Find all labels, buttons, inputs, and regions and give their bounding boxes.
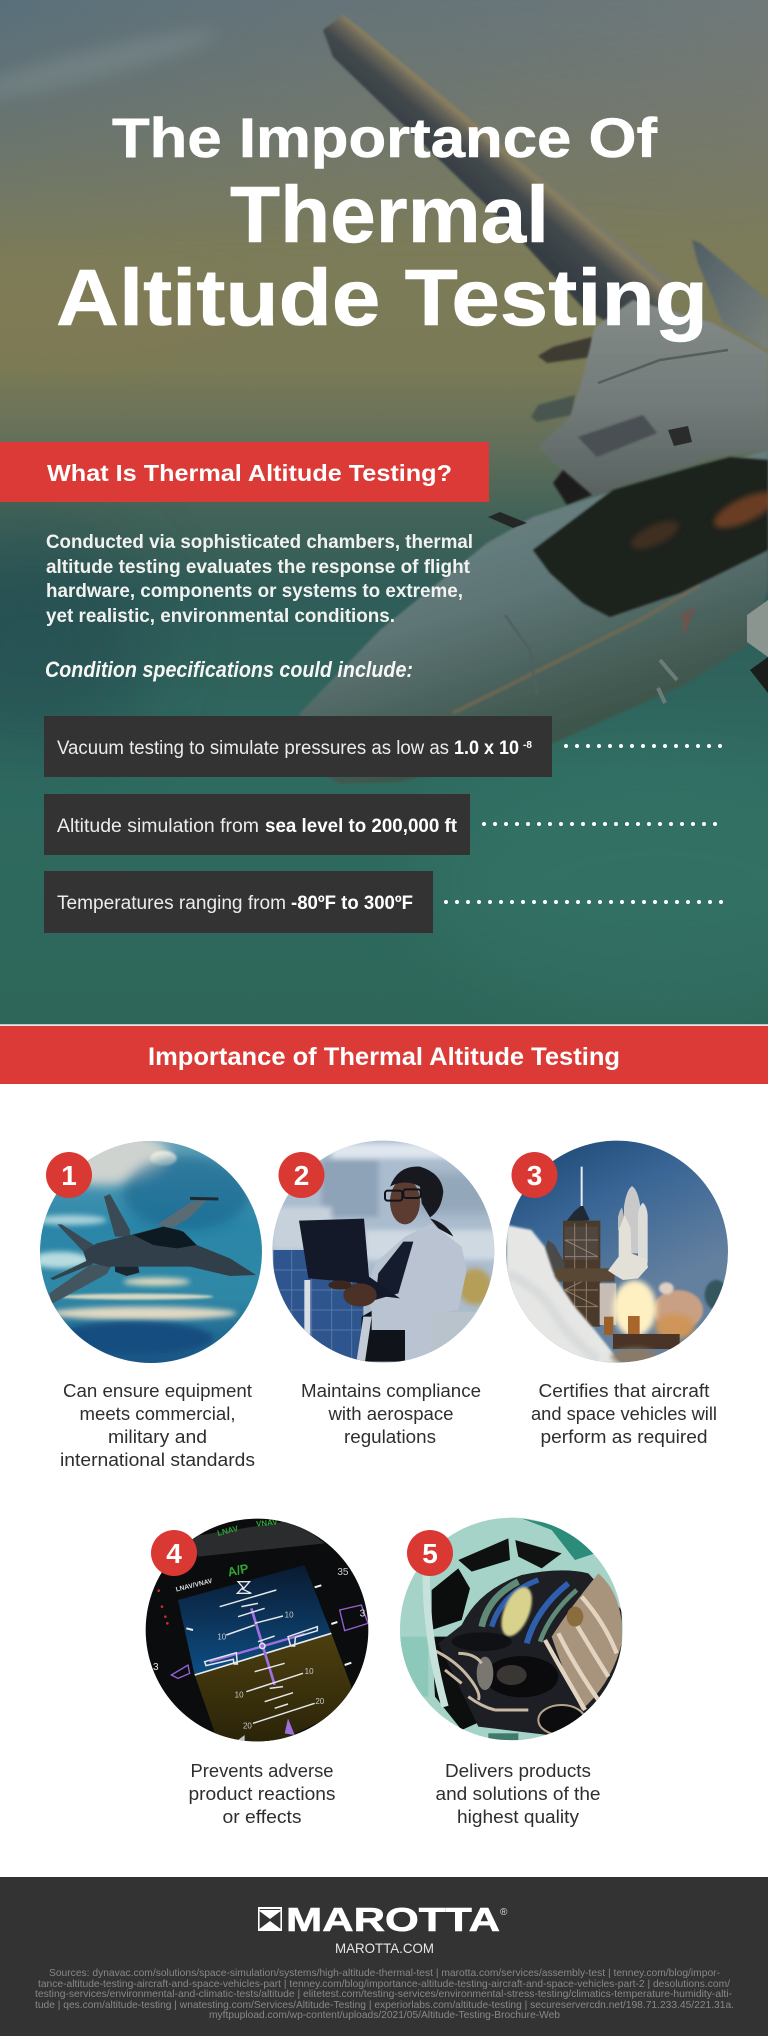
item 4: cockpit attitude display photo with number badge: 10 (217, 1632, 227, 1641)
item 4: cockpit attitude display photo with number badge: 10 (285, 1610, 294, 1619)
caption 5: highest quality (457, 1806, 580, 1827)
caption 2 (301, 1380, 481, 1447)
logo: Marotta (258, 1901, 508, 1938)
caption 5 (436, 1760, 600, 1827)
caption 2: regulations (344, 1426, 436, 1447)
spec bar: vacuum testing: 1.0 x 10 (454, 738, 519, 759)
website: MAROTTA.COM (335, 1940, 434, 1956)
caption 1: military and (108, 1426, 207, 1447)
caption 1: Can ensure equipment (63, 1380, 252, 1401)
item 4: cockpit attitude display photo with number badge: VNAV (256, 1517, 279, 1529)
spec bar: altitude simulation: Altitude simulation from (57, 816, 259, 837)
spec bar: vacuum testing (44, 716, 552, 777)
caption 4: or effects (222, 1806, 302, 1827)
spec bar: temperatures: Temperatures ranging from (57, 893, 286, 914)
caption 5: and solutions of the (436, 1783, 600, 1804)
section banner: importance of thermal altitude testing: Importance of Thermal Altitude Testing (148, 1043, 620, 1071)
item 4: cockpit attitude display photo with number badge: A/P (226, 1561, 250, 1580)
sources text: tance-altitude-testing-aircraft-and-space-vehicles-part | tenney.com/blog/importance-altitude-testing-aircraft-and-space-vehicles-part-2 | desolutions.com/ (38, 1978, 730, 1990)
title (56, 106, 708, 342)
sources text: Sources: dynavac.com/solutions/space-simulation/systems/high-altitude-thermal-test | marotta.com/services/assembly-test | tenney.com/blog/impor- (49, 1967, 720, 1979)
sources text: testing-services/environmental-and-climatic-tests/altitude | elitetest.com/testing-services/environmental-stress-testing/climatics-temperature-humidity-alti- (35, 1988, 732, 2000)
caption 1: international standards (60, 1449, 255, 1470)
intro paragraph (46, 532, 473, 627)
intro paragraph: yet realistic, environmental conditions. (46, 606, 395, 627)
item 4: cockpit attitude display photo with number badge: LNAV/VNAV (175, 1578, 214, 1594)
sources text: myftpupload.com/wp-content/uploads/2021/05/Altitude-Testing-Brochure-Web (209, 2009, 560, 2021)
badge 3 (512, 1152, 558, 1198)
item 3: space shuttle launch photo with number badge (506, 1140, 728, 1363)
item 4: cockpit attitude display photo with number badge: LNAV (216, 1524, 240, 1538)
item 5: jet engine photo with number badge (400, 1518, 623, 1740)
caption 3: perform as required (540, 1426, 708, 1447)
section banner: importance of thermal altitude testing (0, 1024, 768, 1084)
dotted leader: vacuum testing (566, 744, 721, 748)
spec bar: altitude simulation: sea level to 200,000 ft (265, 816, 458, 837)
caption 4: Prevents adverse (190, 1760, 334, 1781)
logo: Marotta: ® (500, 1907, 508, 1918)
sources text (35, 1967, 734, 2021)
badge 2 (278, 1152, 324, 1198)
item 4: cockpit attitude display photo with number badge: 20 (243, 1721, 252, 1730)
caption 5: Delivers products (445, 1760, 591, 1781)
icon: hourglass logo mark (258, 1907, 282, 1931)
intro paragraph: altitude testing evaluates the response of flight (46, 557, 471, 578)
item 1: fighter jet photo with number badge (40, 1141, 262, 1363)
caption 1: meets commercial, (80, 1403, 236, 1424)
white content section background (0, 1025, 768, 1877)
badge 4: 4 (166, 1538, 182, 1569)
heading bar: what is thermal altitude testing: What Is Thermal Altitude Testing? (47, 460, 452, 486)
item 4: cockpit attitude display photo with number badge (146, 1518, 368, 1742)
heading bar: what is thermal altitude testing (0, 442, 489, 502)
title: Thermal (230, 170, 549, 259)
spec bar: altitude simulation (44, 794, 470, 855)
sources text: tude | qes.com/altitude-testing | wnatesting.com/Services/Altitude-Testing | experiorlabs.com/altitude-testing | secureservercdn.net/198.71.233.45/221.31a. (35, 1999, 734, 2011)
spec bar: vacuum testing: Vacuum testing to simulate pressures as low as (57, 738, 449, 759)
item 4: cockpit attitude display photo with number badge: 10 (305, 1667, 314, 1676)
caption 2: Maintains compliance (301, 1380, 481, 1401)
badge 5: 5 (422, 1538, 438, 1569)
intro paragraph: Conducted via sophisticated chambers, thermal (46, 532, 473, 553)
item 4: cockpit attitude display photo with number badge: 35 (337, 1567, 349, 1578)
badge 1 (46, 1152, 92, 1198)
item 4: cockpit attitude display photo with number badge: 3 (360, 1609, 366, 1620)
caption 4 (188, 1760, 336, 1827)
item 2: scientist with laptop photo with number badge (272, 1140, 494, 1363)
badge 4 (151, 1530, 197, 1576)
badge 3: 3 (527, 1160, 542, 1191)
caption 1 (60, 1380, 255, 1470)
badge 1: 1 (61, 1160, 77, 1191)
caption 3: and space vehicles will (531, 1403, 717, 1424)
spec bar: temperatures: -80ºF to 300ºF (291, 893, 413, 914)
dotted leader: altitude simulation (484, 822, 721, 826)
title: Altitude Testing (56, 253, 708, 342)
item 4: cockpit attitude display photo with number badge: 20 (315, 1697, 325, 1706)
caption 3: Certifies that aircraft (538, 1380, 710, 1401)
title: The Importance Of (112, 106, 657, 169)
spec bar: temperatures (44, 871, 433, 933)
badge 5 (407, 1530, 453, 1576)
caption 3 (531, 1380, 717, 1447)
item 4: cockpit attitude display photo with number badge: 10 (235, 1690, 244, 1699)
badge 2: 2 (294, 1160, 309, 1191)
dotted leader: temperatures (446, 900, 723, 904)
logo: Marotta: MAROTTA (286, 1901, 500, 1938)
subheading: condition specifications: Condition specifications could include: (45, 657, 413, 682)
intro paragraph: hardware, components or systems to extreme, (46, 581, 463, 602)
spec bar: vacuum testing: -8 (523, 740, 532, 751)
hero photo background: fighter jet over the sea at dusk (0, 0, 768, 1025)
item 4: cockpit attitude display photo with number badge: 3 (153, 1662, 159, 1673)
caption 4: product reactions (188, 1783, 336, 1804)
caption 2: with aerospace (327, 1403, 454, 1424)
footer panel (0, 1877, 768, 2036)
